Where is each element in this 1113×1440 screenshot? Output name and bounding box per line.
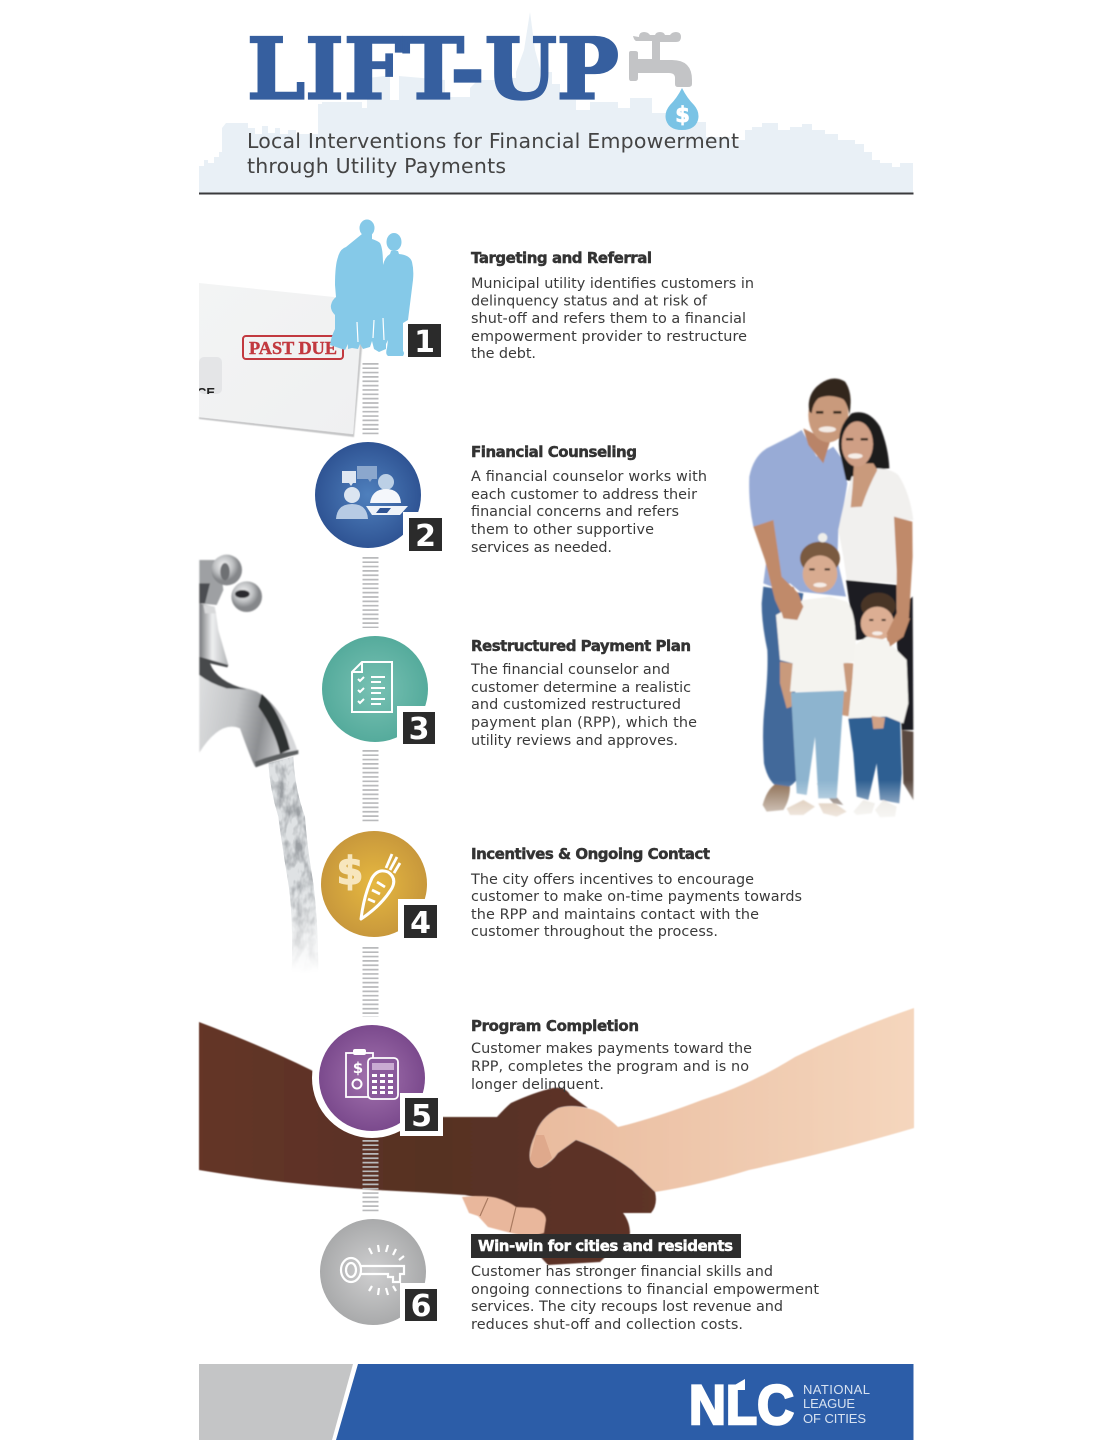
NLC logo (689, 1373, 870, 1436)
step 3 badge (397, 706, 441, 750)
step 3 text: payment plan (RPP), which the (471, 715, 697, 731)
step 2 text: A financial counselor works with (471, 469, 707, 485)
icon: family silhouette (330, 220, 413, 356)
step 5 text: longer delinquent. (471, 1077, 604, 1093)
step 4 text: The city offers incentives to encourage (470, 872, 754, 888)
family photo (747, 378, 920, 830)
faucet and running water photo (199, 555, 318, 973)
step 5 circle with calculator icon (312, 1018, 432, 1138)
footer grey panel (199, 1364, 353, 1440)
step connector 5 (362, 1140, 378, 1212)
step 2 text (471, 443, 707, 556)
icon: water drop with dollar: $ (675, 103, 690, 127)
NLC logo: NLC (689, 1373, 794, 1436)
subtitle: through Utility Payments (247, 154, 506, 178)
step 2 badge: 2 (415, 519, 436, 554)
step 3 text: customer determine a realistic (471, 680, 691, 696)
step 1 text (471, 249, 754, 362)
step 1 text: empowerment provider to restructure (471, 329, 747, 345)
step 4 text: customer to make on-time payments towards (471, 889, 802, 905)
step 5 badge: 5 (411, 1099, 432, 1134)
step 2 text: each customer to address their (471, 487, 697, 503)
NLC logo: LEAGUE (803, 1396, 855, 1411)
NLC logo: OF CITIES (803, 1411, 866, 1426)
step connector 1 (362, 363, 378, 435)
step 3 text: and customized restructured (471, 697, 681, 713)
step 3 text: utility reviews and approves. (471, 733, 678, 749)
step 2 text: services as needed. (471, 540, 612, 556)
step 4 text: customer throughout the process. (471, 924, 718, 940)
step 4 text (470, 845, 802, 940)
envelope with past due stamp: PAST DUE (249, 338, 337, 358)
step 1 text: delinquency status and at risk of (471, 294, 708, 310)
step 1 text: the debt. (471, 346, 536, 362)
step 5 text: Customer makes payments toward the (471, 1041, 752, 1057)
step 3 text: The financial counselor and (470, 662, 670, 678)
step 5 text: Program Completion (471, 1017, 639, 1035)
step 6 heading label: Win-win for cities and residents (478, 1237, 733, 1255)
step 4 badge: 4 (410, 906, 431, 941)
subtitle: Local Interventions for Financial Empowerment (247, 129, 739, 153)
handshake photo (199, 1008, 914, 1265)
step 5 text (471, 1017, 752, 1093)
step 6 badge: 6 (411, 1289, 431, 1324)
step 5 text: RPP, completes the program and is no (471, 1059, 749, 1075)
step 1 badge: 1 (414, 325, 435, 360)
step connector 3 (362, 750, 378, 822)
step 1 text: shut-off and refers them to a financial (471, 311, 746, 327)
step 2 badge (403, 512, 448, 557)
step 4 text: Incentives & Ongoing Contact (471, 845, 710, 863)
footer blue panel (336, 1364, 914, 1440)
step 4 text: the RPP and maintains contact with the (471, 907, 759, 923)
step 6 text (471, 1264, 819, 1333)
step 3 badge: 3 (409, 712, 429, 747)
step 6 circle with key icon (320, 1219, 426, 1325)
envelope with past due stamp: CE (197, 385, 215, 400)
step 3 text (470, 637, 697, 749)
step 6 text: reduces shut-off and collection costs. (471, 1317, 743, 1333)
step 4 badge (398, 899, 443, 944)
title: LIFT-UP (247, 20, 619, 118)
step 2 text: Financial Counseling (471, 443, 637, 461)
step 2 text: financial concerns and refers (471, 504, 679, 520)
step 1 badge (408, 324, 441, 360)
step 2 text: them to other supportive (471, 522, 654, 538)
NLC logo: NATIONAL (803, 1382, 870, 1397)
step 1 text: Municipal utility identifies customers in (471, 276, 754, 292)
step connector 2 (362, 557, 378, 628)
envelope with past due stamp (197, 283, 366, 437)
step 6 text: ongoing connections to financial empowerment (471, 1282, 819, 1298)
step 6 badge (400, 1283, 443, 1326)
step 6 text: services. The city recoups lost revenue and (471, 1299, 783, 1315)
step 4 circle with dollar and carrot icon: $ (337, 849, 363, 893)
header rule (199, 192, 914, 194)
step 5 badge (400, 1093, 443, 1136)
step 2 circle with counselling icon (315, 442, 421, 548)
step connector 4 (362, 947, 378, 1017)
step 4 circle with dollar and carrot icon (321, 831, 427, 937)
step 5 circle with calculator icon: $ (353, 1059, 363, 1077)
icon: water drop with dollar (666, 88, 698, 130)
step 3 circle with checklist icon (322, 636, 428, 742)
icon: grey tap (629, 32, 692, 87)
subtitle (247, 129, 739, 178)
step 3 text: Restructured Payment Plan (471, 637, 691, 655)
step 1 text: Targeting and Referral (471, 249, 652, 267)
header: skyline background (199, 12, 913, 193)
step 6 text: Customer has stronger financial skills and (471, 1264, 773, 1280)
